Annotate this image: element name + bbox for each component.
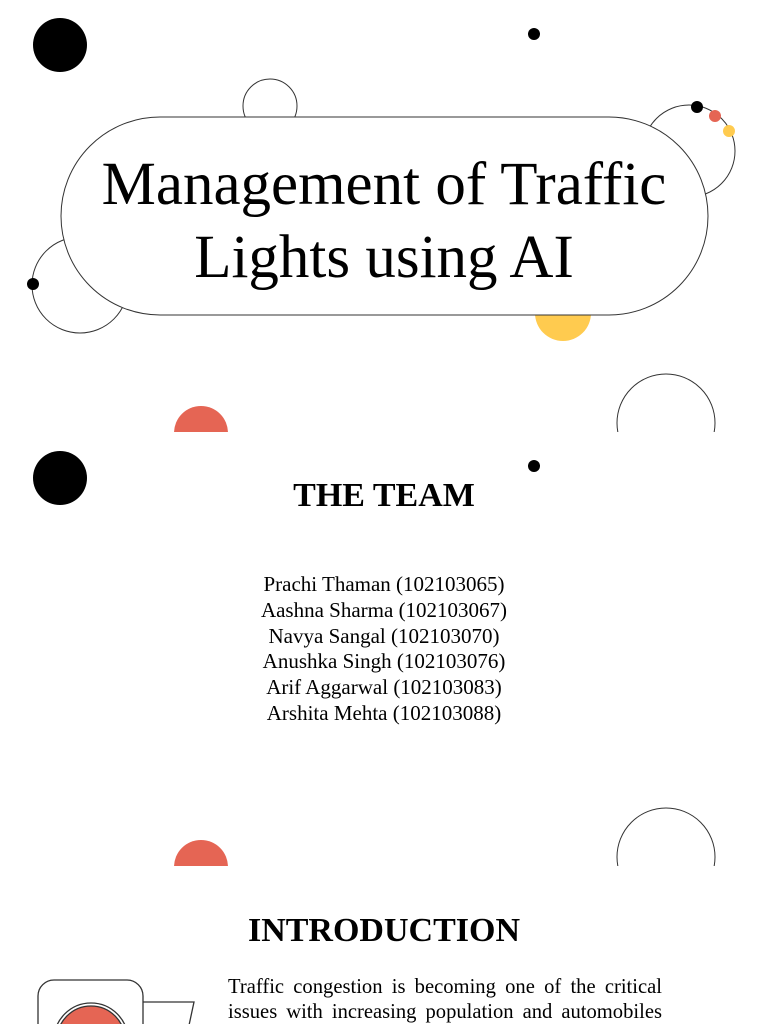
icon: globe card bbox=[38, 980, 194, 1024]
title bbox=[102, 151, 666, 291]
team list: Aashna Sharma (102103067) bbox=[261, 598, 507, 622]
title pill bbox=[61, 117, 708, 315]
team list: Arif Aggarwal (102103083) bbox=[266, 675, 502, 699]
heading: introduction: INTRODUCTION bbox=[248, 912, 520, 949]
team list: Anushka Singh (102103076) bbox=[263, 649, 505, 673]
heading: the team: THE TEAM bbox=[293, 477, 475, 514]
team list: Navya Sangal (102103070) bbox=[269, 624, 499, 648]
title: Lights using AI bbox=[194, 224, 574, 291]
title: Management of Traffic bbox=[102, 151, 666, 218]
team list bbox=[261, 572, 507, 725]
team list: Prachi Thaman (102103065) bbox=[263, 572, 505, 596]
team list: Arshita Mehta (102103088) bbox=[267, 701, 501, 725]
